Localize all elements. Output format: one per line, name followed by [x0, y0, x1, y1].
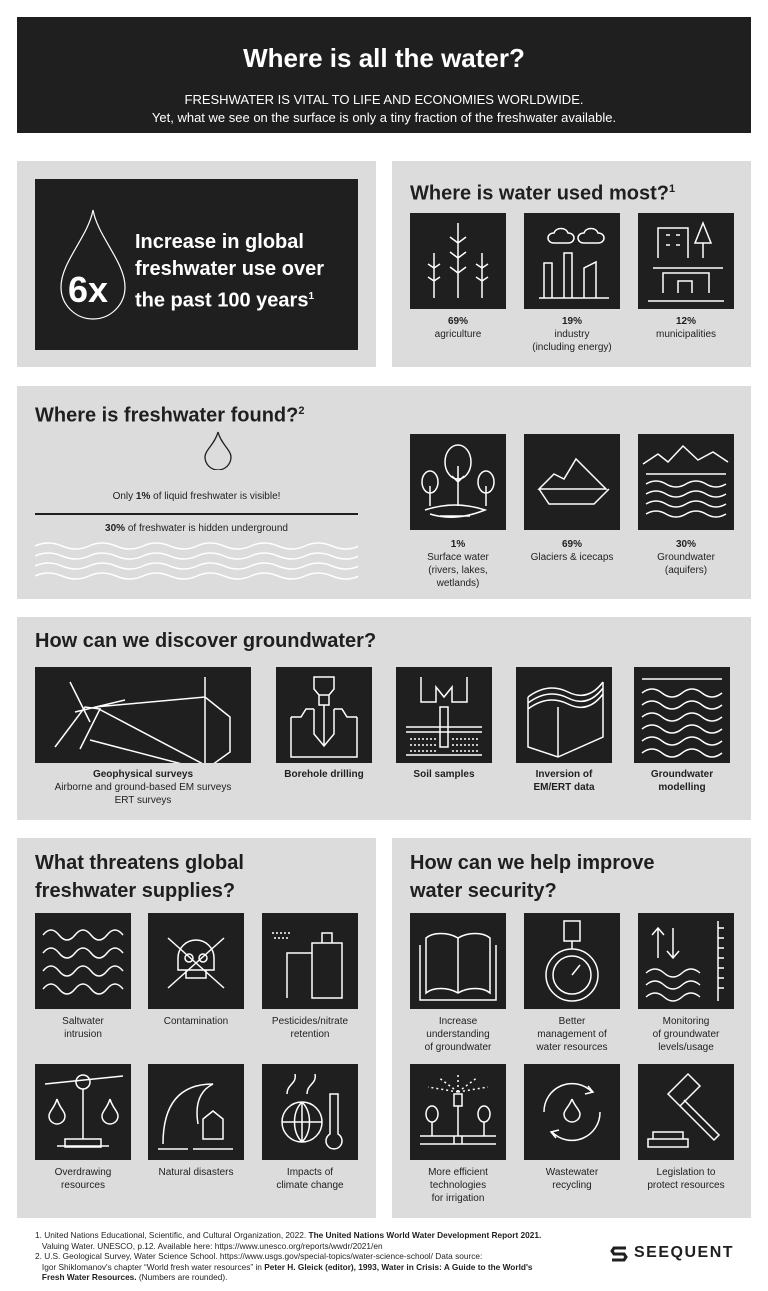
panel: help: for irrigation	[432, 1193, 484, 1204]
text: 30% hidden: 30% of freshwater is hidden underground	[105, 523, 288, 534]
heading	[410, 852, 655, 902]
panel: discover groundwater: Borehole drilling	[284, 769, 364, 780]
heading: water security?	[410, 880, 557, 902]
labels: ERT surveys	[115, 795, 171, 806]
panel: threats: Natural disasters	[158, 1167, 234, 1178]
panel: discover groundwater: Groundwater	[651, 769, 713, 780]
heading: What threatens global	[35, 852, 244, 874]
icon: glaciers	[524, 434, 620, 530]
panel: discover groundwater	[17, 617, 751, 820]
panel: help: protect resources	[647, 1180, 725, 1191]
panel: threats: Impacts of	[287, 1167, 333, 1178]
labels: Airborne and ground-based EM surveys	[55, 782, 231, 793]
logo: Seequent: SEEQUENT	[634, 1244, 734, 1261]
panel: threats: Pesticides/nitrate	[272, 1016, 348, 1027]
heading: How can we discover groundwater?	[35, 630, 376, 652]
labels	[54, 769, 231, 806]
text: increase	[135, 231, 324, 312]
panel: help: of groundwater	[653, 1029, 719, 1040]
icon: contamination	[148, 913, 244, 1009]
labels: (rivers, lakes,	[428, 565, 488, 576]
icon: surface water	[410, 434, 506, 530]
panel: water used most: (including energy)	[532, 342, 612, 353]
labels: 69%	[448, 316, 468, 327]
panel: water used most: 19%	[562, 316, 582, 327]
panel: water used most	[392, 161, 751, 367]
panel: water used most: 12%	[676, 316, 696, 327]
icon: small drop	[204, 432, 232, 470]
heading	[35, 852, 244, 902]
panel: freshwater found: 69%	[562, 539, 582, 550]
panel: help: technologies	[430, 1180, 486, 1191]
panel: help: More efficient	[428, 1167, 488, 1178]
icon: groundwater	[638, 434, 734, 530]
text: 1% visible: Only 1% of liquid freshwater is visible!	[113, 491, 280, 502]
panel: discover groundwater: EM/ERT data	[533, 782, 595, 793]
icon: pesticides	[262, 913, 358, 1009]
icon: irrigation	[410, 1064, 506, 1160]
panel: discover groundwater: modelling	[658, 782, 706, 793]
labels: intrusion	[64, 1029, 102, 1040]
footnotes: Igor Shiklomanov's chapter “World fresh water resources” in Peter H. Gleick (editor), 1993, Water in Crisis: A Guide to the World's	[42, 1262, 533, 1272]
text: increase: freshwater use over	[135, 258, 324, 280]
panel: threats: climate change	[276, 1180, 344, 1191]
panel: freshwater found: (aquifers)	[665, 565, 707, 576]
icon: borehole	[276, 667, 372, 763]
heading: freshwater supplies?	[35, 880, 235, 902]
subtitle	[152, 92, 616, 125]
waves	[35, 542, 358, 580]
labels: agriculture	[435, 329, 481, 340]
panel: freshwater found: Glaciers & icecaps	[531, 552, 613, 563]
icon: agriculture	[410, 213, 506, 309]
labels	[62, 1016, 104, 1040]
panel: help: Better	[559, 1016, 585, 1027]
labels: Increase	[439, 1016, 477, 1027]
icon: drop with 6x	[60, 210, 126, 320]
labels	[427, 539, 489, 589]
panel: threats: Overdrawing	[55, 1167, 111, 1178]
labels: of groundwater	[425, 1042, 491, 1053]
labels: understanding	[426, 1029, 490, 1040]
panel: help: levels/usage	[658, 1042, 714, 1053]
panel: freshwater found: Groundwater	[657, 552, 715, 563]
icon: industry	[524, 213, 620, 309]
heading: Where is freshwater found?2	[35, 405, 304, 427]
panel: threats: resources	[61, 1180, 105, 1191]
icon: inversion	[516, 667, 612, 763]
labels: Geophysical surveys	[93, 769, 193, 780]
icon: geophysical	[35, 667, 251, 763]
header	[17, 17, 751, 133]
labels	[435, 316, 481, 340]
panel: threats: Contamination	[164, 1016, 228, 1027]
icon: soil	[396, 667, 492, 763]
footnotes: Fresh Water Resources. (Numbers are rounded).	[42, 1272, 227, 1282]
panel: threats	[17, 838, 376, 1218]
text: increase: Increase in global	[135, 231, 304, 253]
labels: 1%	[451, 539, 465, 550]
panel: help: Wastewater	[546, 1167, 598, 1178]
icon: climate	[262, 1064, 358, 1160]
footnotes	[35, 1230, 541, 1282]
footnotes: 1. United Nations Educational, Scientific, and Cultural Organization, 2022. The United Nations World Water Development Report 2021.	[35, 1230, 541, 1240]
panel: freshwater found: 30%	[676, 539, 696, 550]
panel: discover groundwater: Inversion of	[536, 769, 592, 780]
subtitle: FRESHWATER IS VITAL TO LIFE AND ECONOMIES WORLDWIDE.	[185, 92, 583, 107]
panel: 6x increase	[17, 161, 376, 367]
panel: help: Legislation to	[657, 1167, 715, 1178]
heading: How can we help improve	[410, 852, 655, 874]
icon: overdrawing	[35, 1064, 131, 1160]
icon: gauge	[524, 913, 620, 1009]
icon: legislation	[638, 1064, 734, 1160]
footnotes: 2. U.S. Geological Survey, Water Science School. https://www.usgs.gov/special-topics/water-science-school/ Data source:	[35, 1251, 482, 1261]
subtitle: Yet, what we see on the surface is only a tiny fraction of the freshwater available.	[152, 110, 616, 125]
title: Where is all the water?	[243, 43, 525, 73]
panel: help	[392, 838, 751, 1218]
panel: discover groundwater: Soil samples	[413, 769, 475, 780]
icon: modelling	[634, 667, 730, 763]
labels: Surface water	[427, 552, 489, 563]
labels	[425, 1016, 492, 1053]
icon: saltwater	[35, 913, 131, 1009]
panel: freshwater found	[17, 386, 751, 599]
heading: Where is water used most?1	[410, 183, 675, 205]
panel: help: recycling	[552, 1180, 592, 1191]
panel: help: management of	[537, 1029, 607, 1040]
panel: water used most: industry	[554, 329, 590, 340]
labels: Saltwater	[62, 1016, 104, 1027]
footnotes: Valuing Water. UNESCO, p.12. Available here: https://www.unesco.org/reports/wwdr/2021/en	[42, 1241, 383, 1251]
icon: disasters	[148, 1064, 244, 1160]
icon: recycling	[524, 1064, 620, 1160]
panel: threats: retention	[291, 1029, 329, 1040]
panel: water used most: municipalities	[656, 329, 716, 340]
text: increase: the past 100 years1	[135, 290, 314, 312]
panel: 6x increase: 6x	[68, 269, 108, 310]
panel: help: Monitoring	[663, 1016, 709, 1027]
icon: book	[410, 913, 506, 1009]
panel: help: water resources	[536, 1042, 608, 1053]
icon: monitoring	[638, 913, 734, 1009]
labels: wetlands)	[437, 578, 479, 589]
icon: municipalities	[638, 213, 734, 309]
